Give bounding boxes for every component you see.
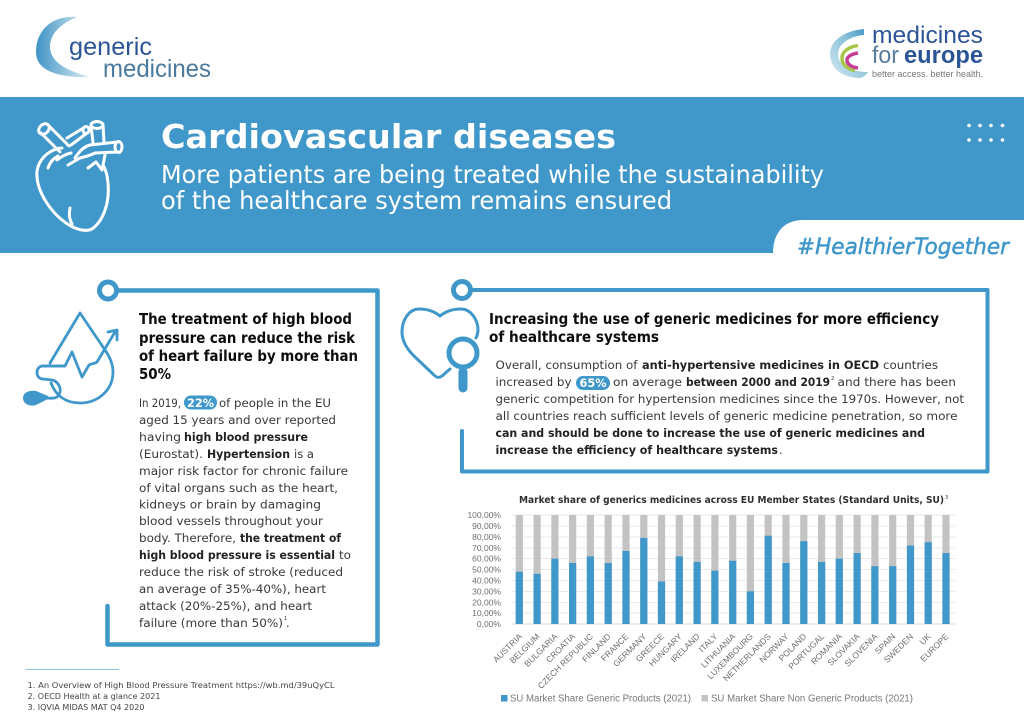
logo: medicines for europe: better access. better health. xyxy=(872,69,983,79)
heading: The treatment of high blood xyxy=(139,310,352,328)
logo: medicines for europe: medicines xyxy=(872,22,983,49)
subtitle: of the healthcare system remains ensured xyxy=(161,186,672,215)
heading: of heart failure by more than xyxy=(139,347,358,365)
footnotes: 3. IQVIA MIDAS MAT Q4 2020 xyxy=(28,703,145,712)
x axis labels: PORTUGAL xyxy=(786,631,826,671)
body text: is a xyxy=(294,447,314,461)
decorative dots xyxy=(967,124,1004,142)
chart title: 3 xyxy=(945,495,948,501)
panel: high blood pressure xyxy=(23,282,378,644)
heading: pressure can reduce the risk xyxy=(139,329,356,347)
subtitle xyxy=(161,160,824,215)
logo: medicines for europe: for xyxy=(872,42,899,69)
logo: medicines for europe: europe xyxy=(904,42,983,69)
body text: an average of 35%-40%), heart xyxy=(139,582,327,596)
body text: Overall, consumption of xyxy=(496,358,639,372)
logo: generic medicines xyxy=(36,17,211,83)
heading: Increasing the use of generic medicines for more efficiency xyxy=(489,310,939,328)
body text: blood vessels throughout your xyxy=(139,514,323,528)
logo: medicines for europe xyxy=(830,22,983,79)
body text: (Eurostat). xyxy=(139,447,203,461)
body text: reduce the risk of stroke (reduced xyxy=(139,565,343,579)
x axis labels: ITALY xyxy=(697,631,720,654)
x axis labels: NORWAY xyxy=(757,631,791,665)
body text: the treatment of xyxy=(240,531,342,545)
x axis labels: BELGIUM xyxy=(508,631,542,665)
icon: heart xyxy=(37,122,122,230)
heading: of healthcare systems xyxy=(489,328,659,346)
y axis labels: 0,00% xyxy=(477,619,501,629)
x axis labels xyxy=(491,631,951,691)
footnotes xyxy=(26,669,335,712)
footnotes: 1. An Overview of High Blood Pressure Treatment https://wb.md/39uQyCL xyxy=(28,681,335,690)
x axis labels: SLOVENIA xyxy=(842,631,880,668)
logo: generic medicines: generic xyxy=(69,33,152,61)
body text: high blood pressure is essential xyxy=(139,548,335,562)
body text: and there has been xyxy=(838,375,956,389)
y axis labels: 10,00% xyxy=(472,608,501,618)
logo: generic medicines: medicines xyxy=(103,55,211,83)
panel frame xyxy=(100,282,378,644)
body text xyxy=(139,396,351,630)
body text: . xyxy=(286,616,290,630)
body text: anti-hypertensive medicines in OECD xyxy=(642,358,879,372)
x axis labels: CZECH REPUBLIC xyxy=(536,631,595,691)
body text: between 2000 and 2019 xyxy=(686,375,830,389)
x axis labels: EUROPE xyxy=(918,631,951,664)
body text: 1 xyxy=(284,616,287,622)
banner xyxy=(0,97,1024,260)
body text: countries xyxy=(883,358,938,372)
body text: major risk factor for chronic failure xyxy=(139,464,348,478)
x axis labels: UK xyxy=(917,631,933,647)
x axis labels: FINLAND xyxy=(580,631,613,664)
body text: attack (20%-25%), and heart xyxy=(139,599,313,613)
body text: high blood pressure xyxy=(184,430,308,444)
x axis labels: HUNGARY xyxy=(647,631,684,668)
x axis labels: ROMANIA xyxy=(809,631,844,666)
legend: SU Market Share Non Generic Products (2021) xyxy=(711,694,913,704)
y axis labels: 20,00% xyxy=(472,598,501,608)
body text: failure (more than 50%) xyxy=(139,616,283,630)
x axis labels: LITHUANIA xyxy=(699,631,738,670)
body text: aged 15 years and over reported xyxy=(139,413,336,427)
body text: increased by xyxy=(496,375,572,389)
highlight: 65%: 65% xyxy=(580,376,607,390)
x axis labels: BULGARIA xyxy=(522,631,560,669)
x axis labels: CROATIA xyxy=(544,631,577,665)
y axis labels: 60,00% xyxy=(472,554,501,564)
subtitle: More patients are being treated while the sustainability xyxy=(161,160,824,189)
body text: . xyxy=(779,443,783,457)
hashtag tab xyxy=(773,220,1024,260)
x axis labels: GERMANY xyxy=(611,631,649,669)
body text: can and should be done to increase the use of generic medicines and xyxy=(496,426,925,440)
body text: In 2019, xyxy=(139,396,181,410)
body text: generic competition for hypertension medicines since the 1970s. However, not xyxy=(496,392,965,406)
x axis labels: NETHERLANDS xyxy=(721,631,773,683)
legend xyxy=(501,694,913,704)
body text: having xyxy=(139,430,181,444)
x axis labels: SPAIN xyxy=(873,631,897,656)
heading xyxy=(139,310,358,383)
body text: of vital organs such as the heart, xyxy=(139,481,338,495)
x axis labels: SWEDEN xyxy=(882,631,915,665)
icon: blood drop with pressure cuff xyxy=(23,313,117,406)
y axis labels: 100,00% xyxy=(467,510,501,520)
y axis labels: 40,00% xyxy=(472,576,501,586)
body text: all countries reach sufficient levels of generic medicine penetration, so more xyxy=(496,409,958,423)
hashtag tab: #HealthierTogether xyxy=(797,235,1011,260)
body text: Hypertension xyxy=(207,447,290,461)
body text: kidneys or brain by damaging xyxy=(139,498,321,512)
generic share bars xyxy=(516,536,950,624)
body text: to xyxy=(339,548,351,562)
bar chart: market share of generics xyxy=(467,495,955,704)
panel frame xyxy=(454,282,988,472)
heading: 50% xyxy=(139,365,171,383)
heading xyxy=(489,310,939,346)
y axis labels: 70,00% xyxy=(472,543,501,553)
x axis labels: AUSTRIA xyxy=(491,631,524,664)
title: Cardiovascular diseases xyxy=(161,117,616,156)
body text: on average xyxy=(613,375,682,389)
y axis labels: 30,00% xyxy=(472,586,501,596)
y axis labels: 50,00% xyxy=(472,564,501,574)
icon: heart with magnifier xyxy=(402,309,478,388)
body text: 2 xyxy=(831,376,834,382)
footnotes: 2. OECD Health at a glance 2021 xyxy=(28,692,161,701)
highlight: 22%: 22% xyxy=(187,396,215,410)
body text: increase the efficiency of healthcare systems xyxy=(496,443,778,457)
x axis labels: LUXEMBOURG xyxy=(705,631,755,681)
x axis labels: SLOVAKIA xyxy=(825,631,862,668)
body text xyxy=(496,358,965,457)
x axis labels: POLAND xyxy=(777,631,808,663)
panel: generic medicines efficiency xyxy=(402,282,988,472)
body text: of people in the EU xyxy=(219,396,331,410)
non generic share bars xyxy=(516,515,950,624)
y axis labels xyxy=(467,510,501,629)
chart title: Market share of generics medicines across EU Member States (Standard Units, SU) xyxy=(519,495,944,506)
x axis labels: GREECE xyxy=(634,631,666,664)
y axis labels: 90,00% xyxy=(472,521,501,531)
legend: SU Market Share Generic Products (2021) xyxy=(510,694,691,704)
y axis labels: 80,00% xyxy=(472,532,501,542)
body text: body. Therefore, xyxy=(139,531,236,545)
x axis labels: FRANCE xyxy=(599,631,631,663)
x axis labels: IRELAND xyxy=(669,631,702,664)
